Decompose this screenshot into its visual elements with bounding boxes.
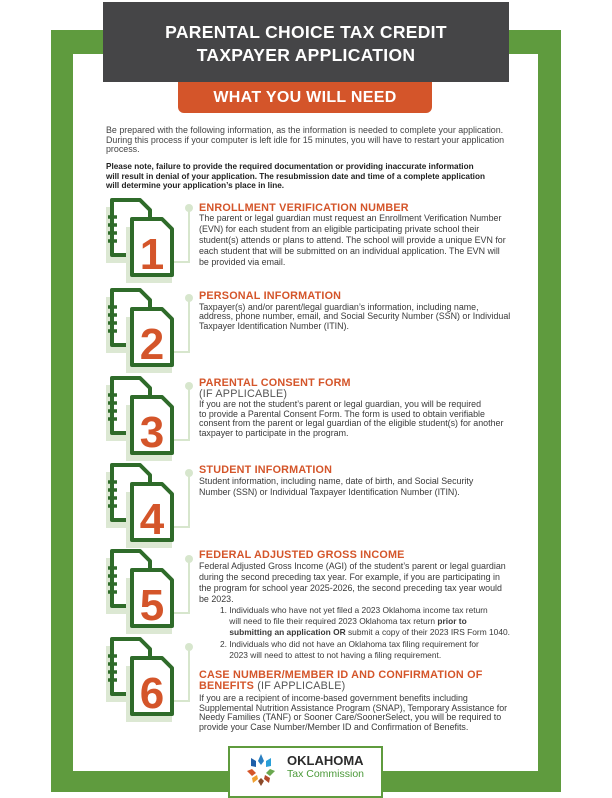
body 5	[199, 561, 506, 604]
body 3: taxpayer to participate in the program.	[199, 428, 348, 438]
heading 5: FEDERAL ADJUSTED GROSS INCOME	[199, 549, 405, 561]
logo text: OKLAHOMA	[287, 753, 364, 768]
white panel	[73, 54, 538, 771]
green frame	[51, 30, 561, 792]
title box: PARENTAL CHOICE TAX CREDIT	[165, 22, 447, 42]
list 5: submitting an application OR submit a copy of their 2023 IRS Form 1040. 2. Individuals who did not have an Oklahoma tax filing requirement for	[220, 627, 510, 649]
intro text: During this process if your computer is left idle for 15 minutes, you will have to restart your application	[106, 135, 504, 145]
body 4	[199, 476, 474, 497]
intro text: process.	[106, 144, 140, 154]
list 5	[220, 605, 510, 660]
body 1: each student that will be submitted on an individual application. The EVN will	[199, 246, 500, 256]
icon: document 4: 4	[140, 495, 165, 544]
body 5: during the second preceding tax year. For example, if you are participating in	[199, 572, 500, 582]
body 6: If you are a recipient of income-based government benefits including	[199, 693, 468, 703]
body 5: be 2023.	[199, 594, 234, 604]
heading 4: STUDENT INFORMATION	[199, 464, 332, 476]
icon: document 2	[106, 288, 193, 373]
icon: document 5	[106, 549, 193, 634]
body 1	[199, 213, 506, 267]
body 6: Needy Families (TANF) or Sooner Care/SoonerSelect, you will be required to	[199, 712, 501, 722]
heading 2: PERSONAL INFORMATION	[199, 290, 341, 302]
heading 6: CASE NUMBER/MEMBER ID AND CONFIRMATION OF	[199, 669, 483, 681]
icon: document 3: 3	[140, 408, 164, 457]
icon: document 4	[106, 463, 193, 548]
list 5: will need to file their required 2023 Oklahoma tax return prior to	[229, 616, 467, 626]
heading 6: BENEFITS (IF APPLICABLE)	[199, 680, 345, 692]
intro text: Be prepared with the following information, as the information is needed to complete your application.	[106, 125, 503, 135]
warning text: will determine your application’s place in line.	[106, 181, 284, 190]
subtitle banner	[178, 82, 432, 113]
icon: document 5: 5	[140, 581, 164, 630]
body 3	[199, 399, 504, 438]
icon: document 1: 1	[140, 230, 164, 279]
logo: Oklahoma Tax Commission: Tax Commission	[287, 768, 364, 780]
logo: Oklahoma Tax Commission	[228, 746, 383, 798]
body 2: Taxpayer(s) and/or parent/legal guardian’s information, including name,	[199, 302, 479, 312]
body 6	[199, 693, 507, 732]
body 5: the program for school year 2025-2026, the second preceding tax year would	[199, 583, 502, 593]
subtitle banner: WHAT YOU WILL NEED	[213, 89, 397, 106]
body 1: The parent or legal guardian must request an Enrollment Verification Number	[199, 213, 501, 223]
body 5: Federal Adjusted Gross Income (AGI) of the student’s parent or legal guardian	[199, 561, 506, 571]
heading 3	[199, 377, 351, 400]
body 6: Supplemental Nutrition Assistance Program (SNAP), Temporary Assistance for	[199, 702, 507, 712]
icon: document 3	[106, 376, 193, 461]
body 2: Taxpayer Identification Number (ITIN).	[199, 321, 349, 331]
body 1: (EVN) for each student from an eligible participating private school their	[199, 224, 479, 234]
icon: document 2: 2	[140, 320, 164, 369]
intro text	[106, 125, 504, 154]
body 1: be provided via email.	[199, 257, 285, 267]
title box: TAXPAYER APPLICATION	[197, 45, 415, 65]
icon: document 6: 6	[140, 669, 164, 718]
heading 3: PARENTAL CONSENT FORM	[199, 377, 351, 389]
icon: document 6	[106, 637, 193, 722]
warning text	[106, 162, 485, 190]
icon: star logo	[247, 754, 275, 786]
title box	[103, 2, 509, 82]
heading 6	[199, 669, 483, 692]
body 3: consent from the parent or legal guardian of the eligible student(s) for another	[199, 418, 503, 428]
heading 3: (IF APPLICABLE)	[199, 388, 287, 400]
body 4: Student information, including name, date of birth, and Social Security	[199, 476, 473, 486]
list 5: 1. Individuals who have not yet filed a 2023 Oklahoma income tax return	[220, 605, 488, 615]
icon: document 1	[106, 198, 193, 283]
body 3: to provide a Parental Consent Form. The form is used to obtain verifiable	[199, 409, 485, 419]
body 2: address, phone number, email, and Social Security Number (SSN) or Individual	[199, 311, 510, 321]
heading 1: ENROLLMENT VERIFICATION NUMBER	[199, 202, 409, 214]
body 1: student(s) attends or plans to attend. The school will provide a unique EVN for	[199, 235, 506, 245]
body 6: provide your Case Number/Member ID and Confirmation of Benefits.	[199, 722, 468, 732]
warning text: Please note, failure to provide the required documentation or providing inaccurate information	[106, 162, 474, 171]
warning text: will result in denial of your application. The resubmission date and time of a complete application	[106, 172, 485, 181]
body 4: Number (SSN) or Individual Taxpayer Identification Number (ITIN).	[199, 487, 460, 497]
list 5: 2023 will need to attest to not having a filing requirement.	[229, 650, 441, 660]
body 2	[199, 302, 510, 331]
body 3: If you are not the student’s parent or legal guardian, you will be required	[199, 399, 481, 409]
